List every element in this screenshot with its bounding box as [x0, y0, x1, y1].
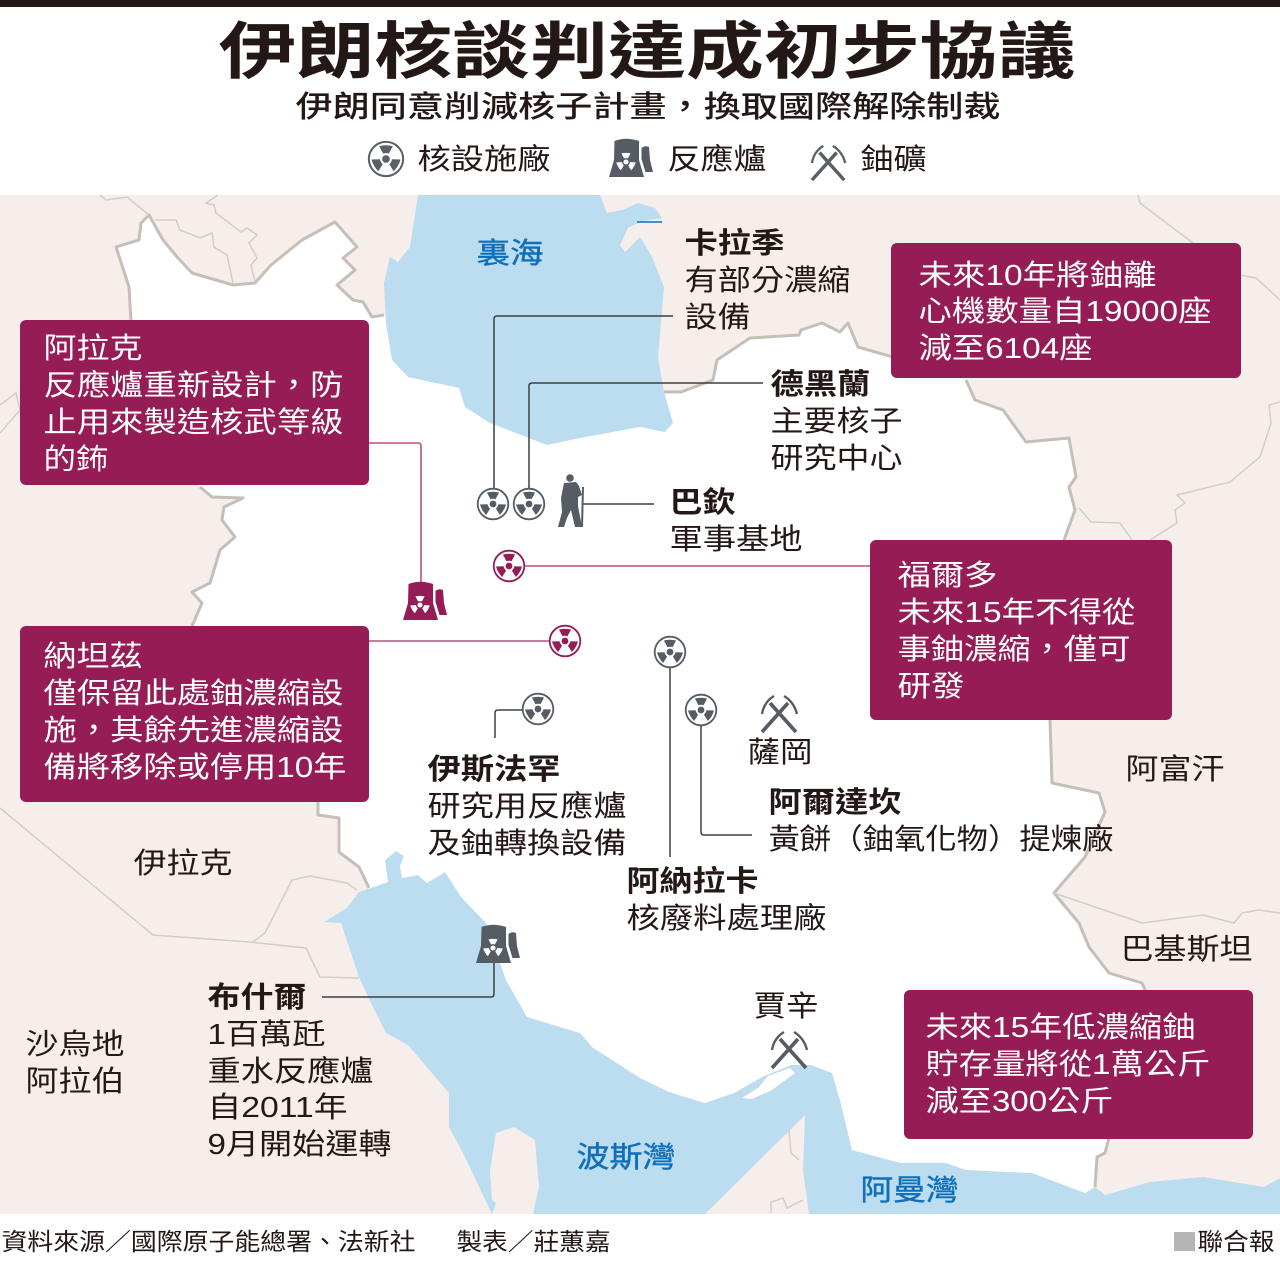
label: Bushehr: 9月開始運轉	[208, 1128, 392, 1161]
label: Ardakan: 阿爾達坎	[768, 786, 902, 819]
icon: Anarak facility	[655, 637, 685, 667]
label: Bushehr: 1百萬瓩	[208, 1018, 326, 1051]
icon: Ardakan facility	[686, 695, 716, 725]
label: Tehran	[770, 368, 902, 475]
icon: Arak reactor	[403, 582, 447, 620]
label: Karaj: 有部分濃縮	[684, 264, 850, 297]
panel: centrifuges: 心機數量自19000座	[918, 295, 1212, 328]
label: Ardakan	[768, 786, 1114, 856]
panel: Natanz: 備將移除或停用10年	[44, 751, 346, 784]
map background	[0, 195, 1280, 1214]
title: 伊朗核談判達成初步協議	[218, 18, 1076, 87]
label: Saghand: 薩岡	[748, 736, 812, 769]
map	[0, 195, 1280, 1214]
label: Karaj: 設備	[684, 301, 750, 334]
country label: Saudi Arabia: 阿拉伯	[26, 1065, 124, 1098]
icon: Gachin mine	[772, 1032, 807, 1068]
label: Isfahan	[428, 753, 626, 860]
label: Karaj: 卡拉季	[684, 227, 784, 260]
icon: reactor legend	[609, 139, 653, 177]
legend label: uranium mine: 鈾礦	[860, 143, 926, 176]
panel: Arak: 止用來製造核武等級	[44, 406, 344, 439]
footer: credit: 製表／莊蕙嘉	[456, 1229, 610, 1256]
icon: nuclear facility legend	[369, 142, 403, 176]
icon: uranium mine legend	[812, 146, 845, 180]
country label: Saudi Arabia: 沙烏地	[26, 1028, 124, 1061]
panel: low-enriched uranium: 貯存量將從1萬公斤	[926, 1048, 1210, 1081]
label: Isfahan: 伊斯法罕	[428, 753, 560, 786]
label: Isfahan: 及鈾轉換設備	[428, 827, 626, 860]
footer: source: 資料來源／國際原子能總署、法新社	[2, 1229, 416, 1256]
panel: Arak: 阿拉克	[44, 332, 142, 365]
panel: centrifuges: 未來10年將鈾離	[918, 259, 1156, 292]
panel: Fordow: 福爾多	[898, 559, 998, 592]
panel: low-enriched uranium: 減至300公斤	[926, 1085, 1114, 1118]
panel: low-enriched uranium: 未來15年低濃縮鈾	[926, 1011, 1196, 1044]
country label: Saudi Arabia	[26, 1028, 124, 1098]
label: Tehran: 主要核子	[770, 405, 902, 438]
icon: Tehran facility	[514, 489, 544, 519]
panel: Natanz: 僅保留此處鈾濃縮設	[44, 677, 344, 710]
label: Gachin: 賈辛	[754, 990, 818, 1023]
label: Bushehr	[208, 981, 392, 1161]
label: Anarak	[626, 865, 826, 935]
label: Parchin: 巴欽	[670, 486, 736, 519]
Iran territory	[116, 215, 1146, 1193]
panel: Natanz: 納坦茲	[44, 640, 142, 673]
label: Parchin	[670, 486, 802, 556]
panel: centrifuges: 減至6104座	[918, 332, 1092, 365]
label: Ardakan: 黃餅（鈾氧化物）提煉廠	[768, 823, 1114, 856]
label: Karaj	[684, 227, 850, 334]
country label: Pakistan: 巴基斯坦	[1120, 933, 1252, 966]
panel: low-enriched uranium	[904, 990, 1253, 1139]
label: Anarak: 核廢料處理廠	[626, 902, 826, 935]
panel: Arak	[20, 320, 369, 485]
panel: Arak: 反應爐重新設計，防	[44, 369, 344, 402]
subtitle: 伊朗同意削減核子計畫，換取國際解除制裁	[296, 91, 1000, 124]
icon: Saghand mine	[762, 696, 797, 732]
label: Isfahan: 研究用反應爐	[428, 790, 626, 823]
panel: Natanz: 施，其餘先進濃縮設	[44, 714, 344, 747]
Persian Gulf and Gulf of Oman	[324, 851, 1280, 1214]
sea label: Persian Gulf: 波斯灣	[576, 1141, 676, 1174]
country label: Iraq: 伊拉克	[134, 847, 232, 880]
sea label: Caspian: 裏海	[476, 237, 544, 270]
icon: Parchin soldier	[558, 474, 583, 527]
Caspian Sea	[384, 195, 673, 445]
top bar	[0, 0, 1280, 7]
icon: Isfahan facility	[523, 694, 553, 724]
icon: Fordow facility	[494, 551, 524, 581]
country label: Afghanistan: 阿富汗	[1126, 753, 1224, 786]
panel: centrifuges	[891, 243, 1241, 378]
label: Bushehr: 重水反應爐	[208, 1055, 374, 1088]
legend	[369, 139, 926, 180]
panel: Fordow: 事鈾濃縮，僅可	[898, 633, 1130, 666]
Qeshm island	[742, 1068, 795, 1099]
blue marker	[637, 221, 662, 223]
label: Tehran: 研究中心	[770, 442, 902, 475]
panel: Fordow	[870, 540, 1172, 720]
icon: Natanz facility	[550, 626, 580, 656]
legend label: reactor: 反應爐	[668, 143, 766, 176]
footer: brand: 聯合報	[1198, 1229, 1274, 1256]
panel: Fordow: 研發	[898, 670, 964, 703]
label: Parchin: 軍事基地	[670, 523, 802, 556]
icon: Bushehr reactor	[476, 925, 520, 963]
label: Bushehr: 自2011年	[208, 1091, 348, 1124]
label: Anarak: 阿納拉卡	[626, 865, 758, 898]
panel: Fordow: 未來15年不得從	[898, 596, 1136, 629]
label: Tehran: 德黑蘭	[770, 368, 870, 401]
label: Bushehr: 布什爾	[208, 981, 306, 1014]
panel: Natanz	[20, 626, 369, 802]
panel: Arak: 的鈽	[44, 443, 108, 476]
icon: Karaj facility	[478, 489, 508, 519]
legend label: nuclear facility: 核設施廠	[418, 143, 550, 176]
sea label: Gulf of Oman: 阿曼灣	[860, 1174, 958, 1207]
connector lines	[322, 316, 870, 997]
